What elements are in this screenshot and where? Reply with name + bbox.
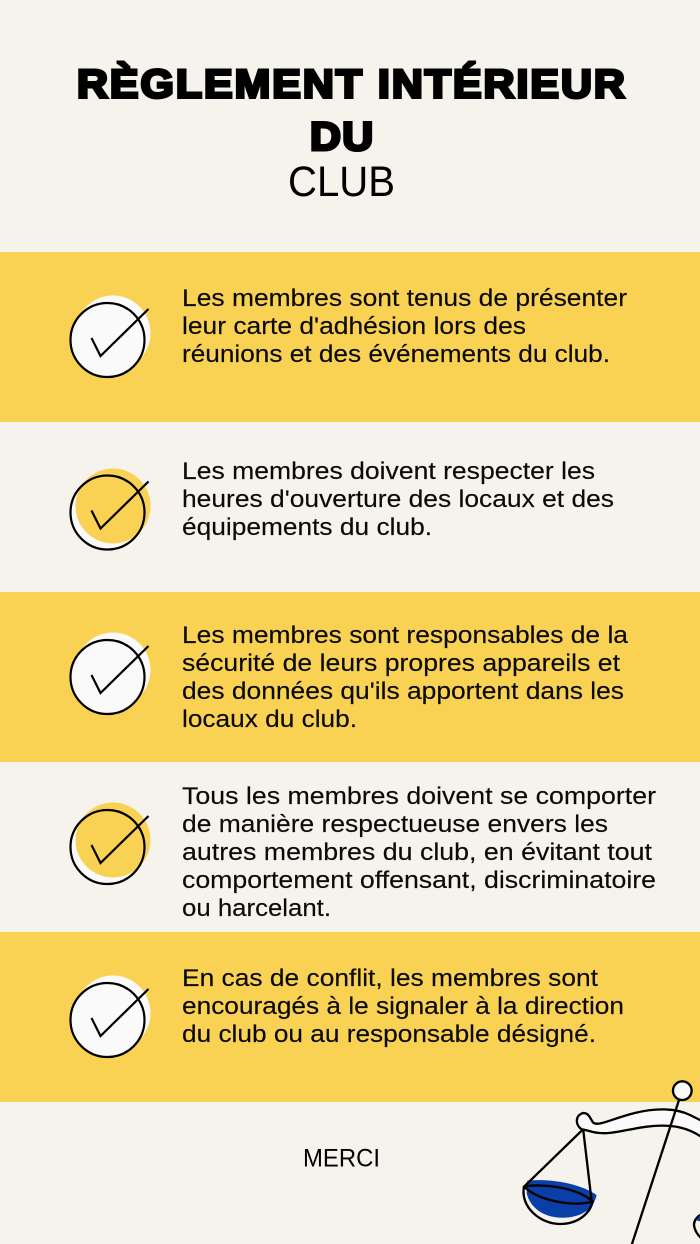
rule 2 text: équipements du club. (182, 514, 432, 541)
rule 2 text: Les membres doivent respecter les (182, 458, 595, 485)
rule 3 text: sécurité de leurs propres appareils et (182, 650, 620, 677)
rule 1 text: Les membres sont tenus de présenter (182, 285, 627, 312)
rule 4 text (182, 783, 656, 922)
panel: rule 4 (70, 783, 656, 922)
panel: rule 2 (70, 458, 614, 550)
rule 4 text: autres membres du club, en évitant tout (182, 839, 652, 866)
panel: rule 5 (0, 932, 700, 1102)
rule 4 text: ou harcelant. (182, 895, 331, 922)
rule 1 text: réunions et des événements du club. (182, 341, 610, 368)
rule 2 text: heures d'ouverture des locaux et des (182, 486, 614, 513)
icon: check mark 3 (70, 632, 150, 714)
closing text: MERCI (303, 1144, 380, 1172)
icon: check mark 1 (70, 296, 150, 377)
title: CLUB (288, 158, 395, 206)
rule 5 text: du club ou au responsable désigné. (182, 1021, 596, 1048)
rule 4 text: Tous les membres doivent se comporter (182, 783, 656, 810)
icon: check mark 2 (70, 468, 150, 550)
rule 1 text: leur carte d'adhésion lors des (182, 313, 526, 340)
rule 1 text (182, 285, 627, 368)
rule 4 text: comportement offensant, discriminatoire (182, 867, 656, 894)
icon: check mark 5 (70, 976, 150, 1057)
rule 3 text: des données qu'ils apportent dans les (182, 678, 624, 705)
rule 5 text: En cas de conflit, les membres sont (182, 965, 598, 992)
rule 2 text (182, 458, 614, 541)
rule 3 text: Les membres sont responsables de la (182, 622, 629, 649)
rule 4 text: de manière respectueuse envers les (182, 811, 608, 838)
panel: rule 3 (0, 592, 700, 762)
icon: check mark 4 (70, 802, 150, 884)
rule 3 text: locaux du club. (182, 706, 357, 733)
rule 5 text: encouragés à le signaler à la direction (182, 993, 624, 1020)
title: DU (310, 114, 373, 159)
title: RÈGLEMENT INTÉRIEUR (77, 62, 625, 106)
title (77, 62, 625, 206)
rule 3 text (182, 622, 629, 733)
panel: rule 1 (0, 252, 700, 422)
rule 5 text (182, 965, 624, 1048)
icon: scales of justice (523, 1081, 700, 1244)
